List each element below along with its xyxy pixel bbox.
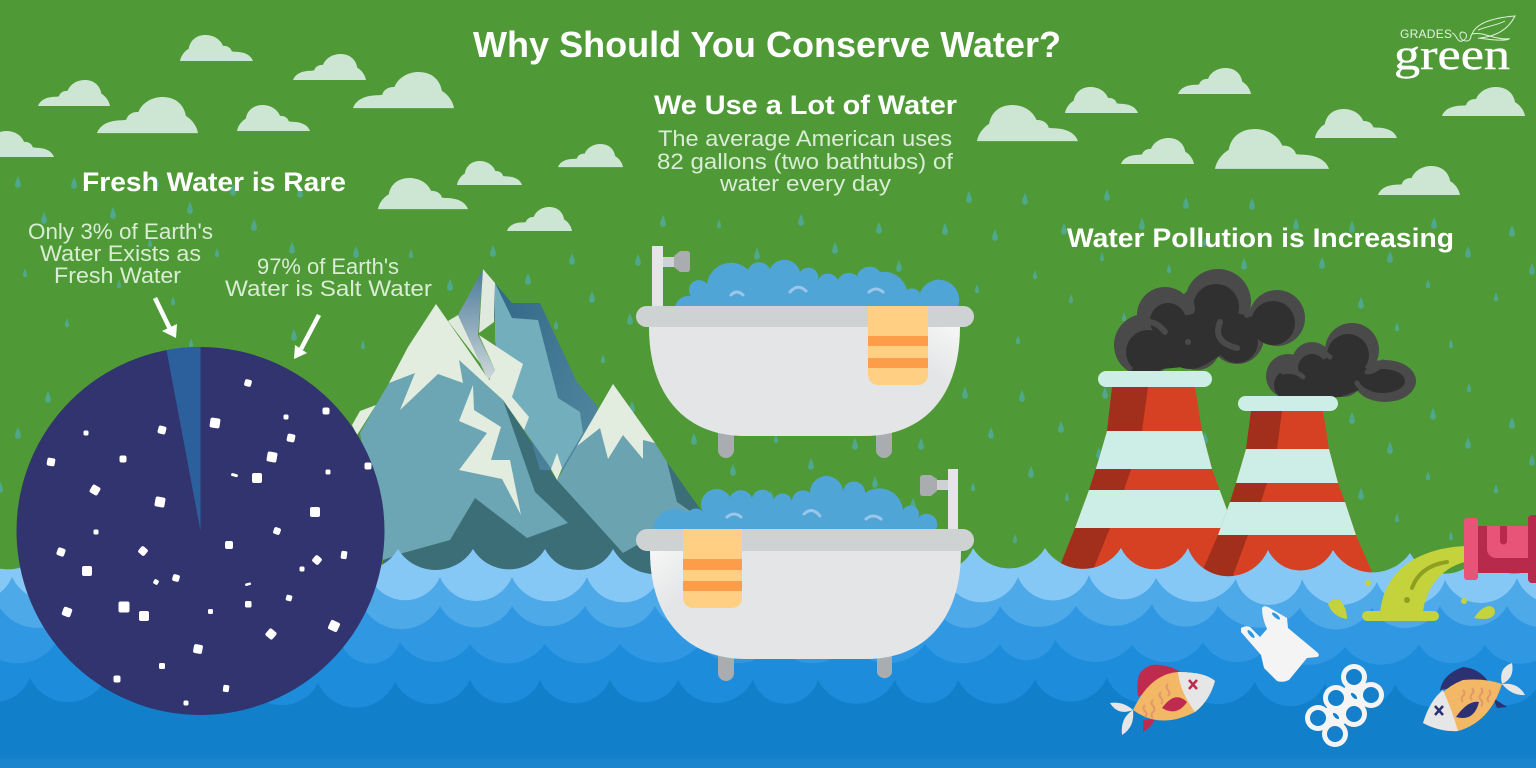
title: Why Should You Conserve Water? (473, 24, 1061, 65)
logo: Grades of Green (1394, 16, 1515, 79)
text: 97 percent: Water is Salt Water (225, 276, 433, 301)
text: only 3 percent: Only 3% of Earth's (28, 219, 213, 244)
text: only 3 percent: Fresh Water (54, 263, 182, 288)
smoke: small tower (1266, 323, 1416, 402)
text: average American: water every day (719, 171, 892, 196)
faucet (652, 246, 690, 308)
text: average American (657, 126, 954, 196)
text: average American: The average American uses (658, 126, 952, 151)
feet (718, 430, 892, 458)
tower: large (1061, 387, 1227, 570)
dead fish: right (1423, 663, 1525, 731)
text: only 3 percent (28, 219, 213, 288)
rim (636, 306, 974, 327)
smoke: large tower (1114, 269, 1305, 376)
arrow: to salt water (294, 315, 319, 359)
bathtub: top (636, 246, 974, 458)
slice: fresh water (166, 347, 200, 531)
faucet (920, 469, 958, 531)
rim (636, 529, 974, 551)
logo: Grades of Green: green (1394, 32, 1510, 79)
text: only 3 percent: Water Exists as (40, 241, 201, 266)
dead fish: left (1110, 665, 1215, 735)
feet (718, 650, 892, 681)
arrow: to fresh water slice (155, 298, 177, 338)
salt grains (46, 379, 371, 706)
logo: Grades of Green: GRADES (1400, 27, 1452, 41)
bathtub: bottom (636, 469, 974, 681)
heading: We Use a Lot of Water: We Use a Lot of Water (654, 90, 958, 120)
rain drops (0, 176, 1535, 543)
pipe sludge (1328, 546, 1495, 621)
sewage pipe (1328, 515, 1536, 621)
tower: small (1204, 411, 1372, 576)
ocean waves (0, 548, 1536, 768)
pipe body (1464, 515, 1536, 583)
tub body (649, 327, 960, 436)
cooling towers and smoke (1050, 269, 1416, 587)
heading: Fresh Water is Rare: Fresh Water is Rare (82, 167, 346, 197)
foam (653, 476, 937, 531)
six-pack rings (1305, 664, 1384, 747)
towel (868, 306, 928, 385)
heading: Water Pollution is Increasing: Water Pollution is Increasing (1067, 223, 1454, 253)
text: 97 percent (225, 254, 433, 301)
text: 97 percent: 97% of Earth's (257, 254, 399, 279)
clouds (0, 35, 1525, 231)
tub body (650, 551, 961, 659)
pie chart: 97 percent salt, 3 percent fresh (16, 347, 384, 715)
plastic bag (1241, 606, 1319, 682)
foam (675, 260, 959, 307)
mountains (352, 269, 703, 590)
text: average American: 82 gallons (two bathtubs) of (657, 149, 954, 174)
towel (683, 529, 742, 608)
